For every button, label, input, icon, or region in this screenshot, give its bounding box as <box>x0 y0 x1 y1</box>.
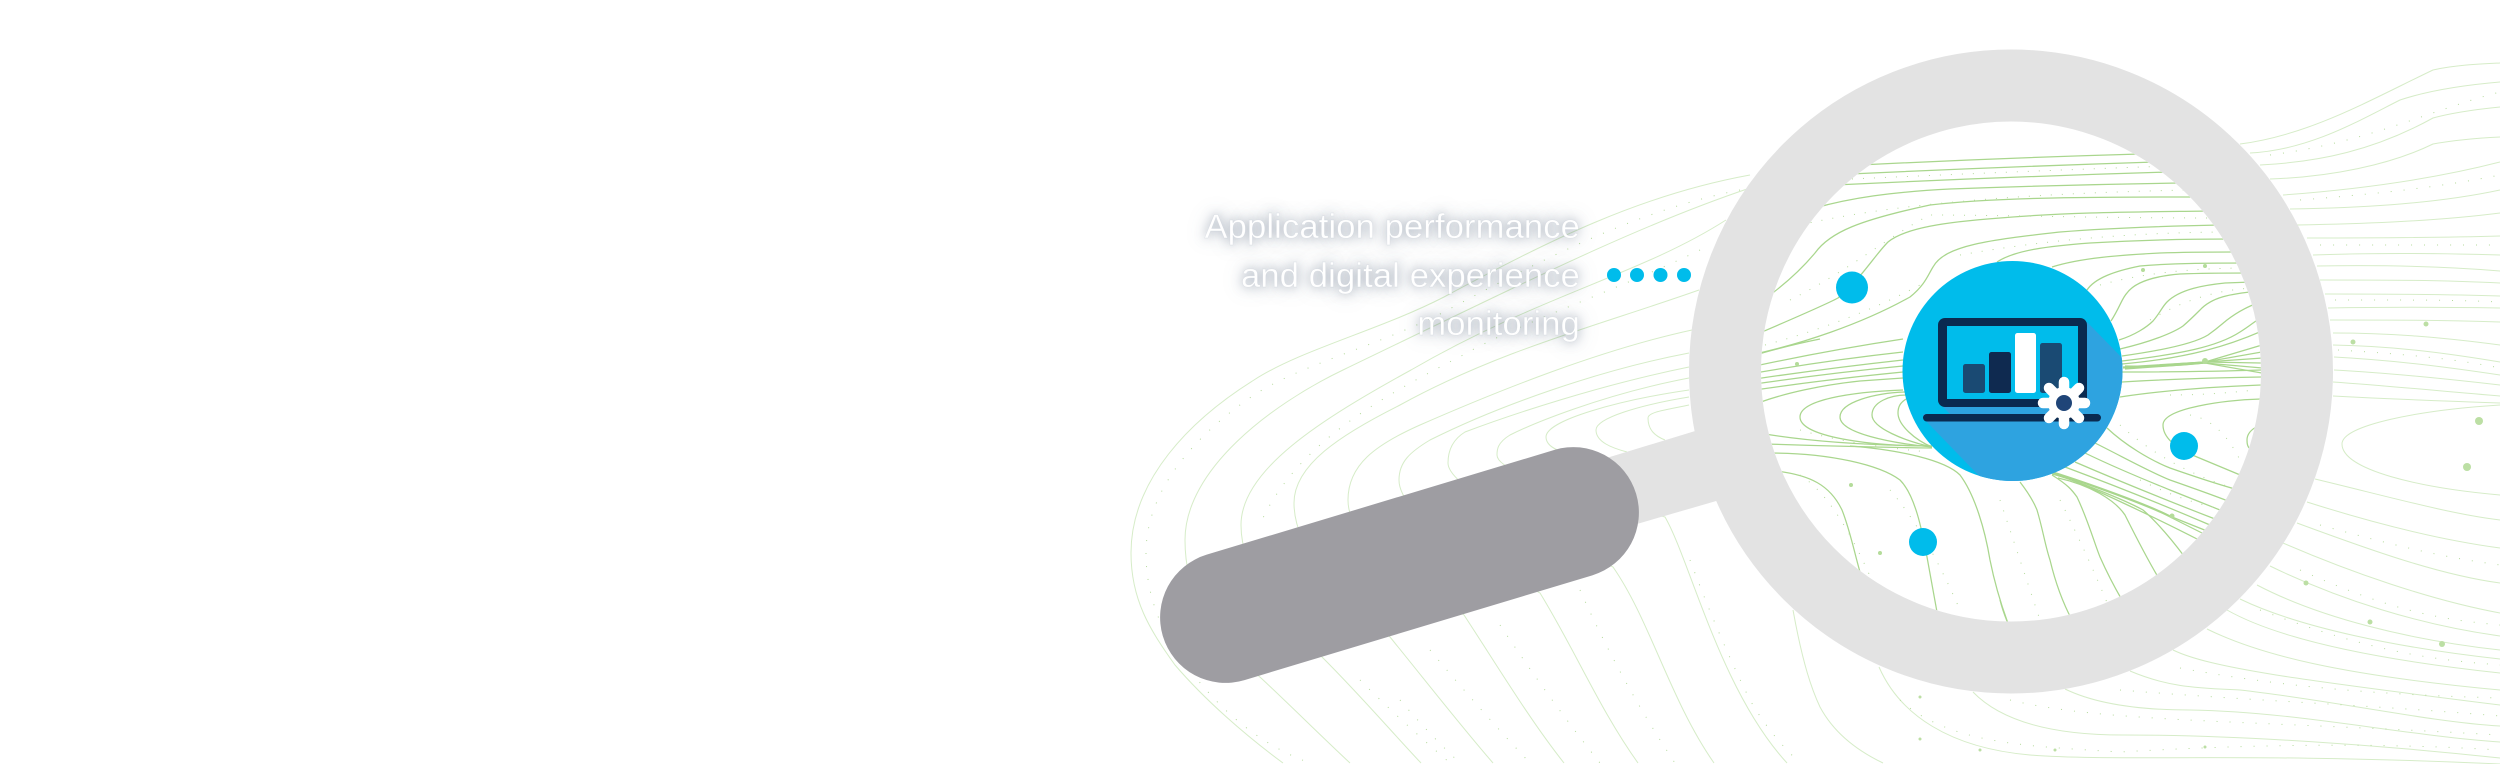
green nodes inside lens <box>1795 264 2208 555</box>
connector dots <box>1607 268 1691 282</box>
label: monitoring caption: Application performance <box>1204 208 1580 246</box>
illustration: magnifying glass over contour line field <box>1130 50 2500 764</box>
label: monitoring caption <box>1200 206 1586 348</box>
contour lines inside lens <box>1755 154 2262 626</box>
scattered green nodes <box>1918 322 2483 752</box>
magnifier neck <box>1600 428 1730 526</box>
label: monitoring caption: and digital experience <box>1241 256 1580 294</box>
stippled dots along outer lines <box>1146 92 2500 763</box>
stippled dots inside lens <box>1765 166 2255 620</box>
gear <box>2043 382 2085 424</box>
laptop screen <box>1938 318 2087 407</box>
blue node: upper left <box>1836 272 1868 304</box>
bar chart <box>1963 333 2062 393</box>
blue node: right <box>2170 432 2198 460</box>
contour lines: outer light field <box>1131 63 2500 764</box>
magnifier ring <box>1725 86 2297 658</box>
laptop base <box>1923 414 2101 422</box>
blue node: lower <box>1909 528 1937 556</box>
lens interior <box>1755 122 2262 626</box>
icon: laptop with bar chart and gear <box>1902 261 2122 481</box>
label: monitoring caption: monitoring <box>1417 305 1580 343</box>
magnifier handle <box>1226 513 1573 617</box>
